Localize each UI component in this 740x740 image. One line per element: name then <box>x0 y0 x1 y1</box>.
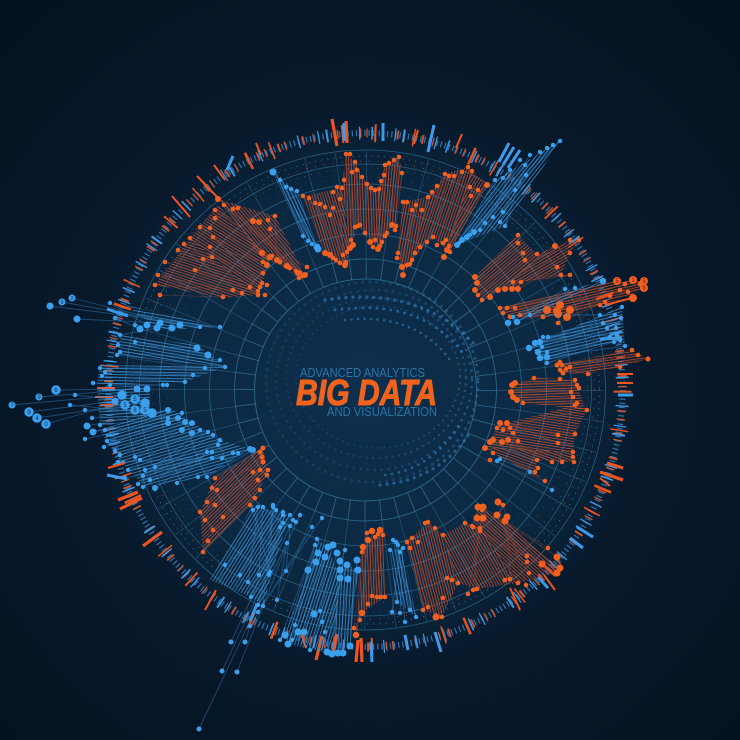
sector: top-left orange <box>155 199 307 297</box>
sector: lower left blue fan with long ray <box>199 505 300 729</box>
center dotted tunnel <box>266 282 478 485</box>
sector: top right orange <box>397 167 487 275</box>
sector: right long orange with numbered nodes: 9 <box>642 286 646 292</box>
sector: left numbered blue nodes: 5 <box>123 403 127 409</box>
sector: left numbered blue nodes: 0 <box>44 422 48 428</box>
sector: left numbered blue nodes: 9 <box>37 395 41 401</box>
sector: left numbered blue nodes: 5 <box>143 408 147 414</box>
scattered data dots <box>132 156 600 624</box>
sector: right blue <box>508 281 625 363</box>
sector: left numbered blue nodes: 4 <box>35 416 39 422</box>
sector: right long orange with numbered nodes <box>500 278 646 323</box>
sector: right lower orange <box>485 405 587 490</box>
large outer ticks <box>95 119 633 662</box>
sector: right long orange with numbered nodes: 5 <box>615 279 619 285</box>
sector: left numbered blue nodes: 8 <box>133 408 137 414</box>
sector: bottom blue cluster <box>250 518 358 654</box>
sector: bottom blue small <box>390 540 416 622</box>
sector: right center orange <box>511 378 579 403</box>
sector: top blue right <box>457 141 560 245</box>
sector: top blue arc left <box>273 172 318 249</box>
title: ADVANCED ANALYTICS: ADVANCED ANALYTICS <box>300 366 425 380</box>
title: AND VISUALIZATION: AND VISUALIZATION <box>327 405 437 419</box>
sector: top center orange <box>303 154 402 266</box>
sector hatching: blue <box>97 141 625 654</box>
sector: left upper blue: 9 <box>60 300 64 306</box>
sector: left upper blue <box>50 296 225 385</box>
sector: lower right orange <box>407 502 560 617</box>
sector: right upper orange <box>475 235 579 300</box>
sector: left numbered blue nodes: 9 <box>27 410 31 416</box>
sector hatching: orange <box>155 154 648 635</box>
sector: left numbered blue nodes: 6 <box>54 388 58 394</box>
sector: bottom orange <box>354 530 385 635</box>
sector: left numbered blue nodes: 5 <box>133 397 137 403</box>
sector: right long orange with numbered nodes: 1 <box>631 278 635 284</box>
polar grid <box>126 150 606 630</box>
sector: left lower blue <box>93 410 253 488</box>
sector: right long orange with numbered nodes: 5 <box>642 279 646 285</box>
outer tick ring <box>100 124 631 656</box>
sector: left numbered blue nodes: 7 <box>10 403 14 409</box>
sector: left upper blue: 2 <box>70 296 74 302</box>
sector: lower left orange <box>200 448 268 552</box>
sector: right orange rays <box>557 350 648 374</box>
title: BIG DATA: BIG DATA <box>296 372 437 413</box>
sector: left numbered blue nodes <box>10 388 182 439</box>
